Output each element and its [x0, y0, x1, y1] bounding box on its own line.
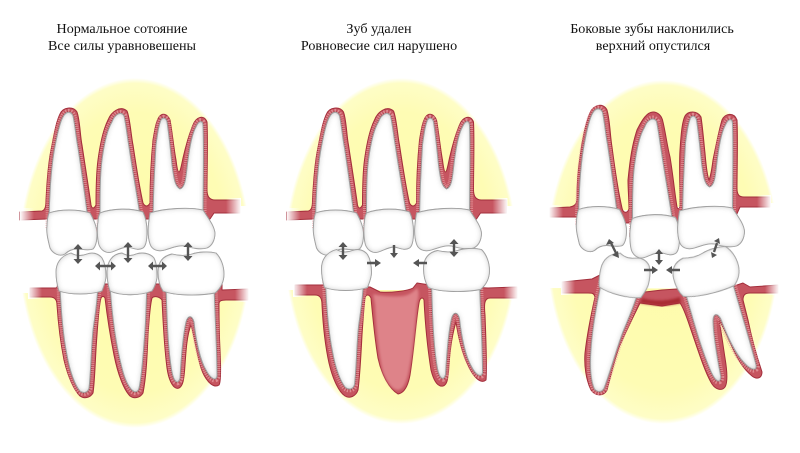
- lower gum: [28, 284, 249, 398]
- upper gum: [549, 105, 771, 223]
- lower teeth: [56, 252, 224, 392]
- panel: tooth removed: [281, 21, 522, 424]
- title: tooth removed: [301, 21, 457, 54]
- title: normal state: Нормальное сотояние: [57, 21, 187, 37]
- title: teeth tilted: [570, 21, 734, 54]
- title: normal state: Все силы уравновешены: [48, 38, 197, 54]
- force arrows: [338, 239, 458, 267]
- upper gum: [20, 108, 241, 222]
- title: tooth removed: Зуб удален: [346, 21, 412, 37]
- lower gum: [561, 275, 779, 395]
- bone background: [547, 80, 779, 424]
- lower teeth: [322, 248, 490, 389]
- upper gum: [286, 108, 508, 222]
- lower teeth: [571, 244, 764, 397]
- upper teeth: [576, 109, 744, 258]
- title: teeth tilted: верхний опустился: [596, 38, 711, 54]
- lower gum with empty socket: [293, 283, 518, 397]
- upper teeth: [47, 112, 215, 255]
- title: normal state: [48, 21, 197, 54]
- panel: teeth tilted: [545, 21, 782, 424]
- panel: normal state: [15, 21, 255, 428]
- upper teeth: [313, 112, 482, 255]
- title: tooth removed: Ровновесие сил нарушено: [301, 38, 457, 54]
- title: teeth tilted: Боковые зубы наклонились: [570, 21, 734, 37]
- bone background: [285, 78, 517, 424]
- empty tooth socket: [373, 288, 418, 390]
- force arrows: [606, 238, 720, 274]
- bone background: [19, 78, 251, 428]
- force arrows: [74, 242, 192, 270]
